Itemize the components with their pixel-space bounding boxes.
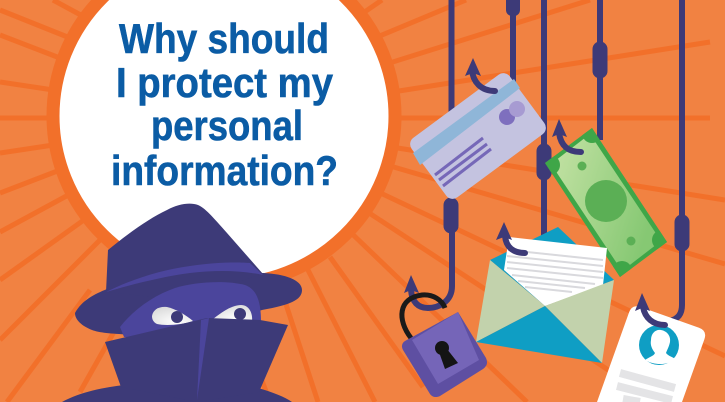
hook on banknote (552, 119, 581, 152)
hook on document (635, 293, 665, 325)
coat collar (105, 318, 288, 402)
title: Why should (119, 15, 329, 62)
line 1 connector (444, 205, 458, 226)
note corners (545, 128, 667, 277)
portrait badge (639, 325, 679, 365)
envelope bottom (476, 306, 602, 363)
fishing line 2 (506, 0, 520, 90)
fishing line 4 (597, 0, 603, 140)
spy figure (62, 204, 302, 402)
keyhole (435, 341, 458, 369)
right eye (213, 305, 252, 322)
padlock face (412, 312, 479, 384)
padlock (402, 312, 487, 397)
envelope back flap (490, 227, 614, 306)
padlock body (402, 312, 487, 397)
hook on padlock arrowhead (404, 275, 419, 293)
fishing line 5 with hook (670, 0, 682, 321)
hook on envelope (496, 222, 525, 253)
left eye (152, 307, 193, 325)
hat crown (106, 204, 263, 300)
id document (597, 306, 705, 402)
fishing line 1 with hook (411, 0, 452, 308)
envelope right flap (545, 280, 614, 363)
spy coat shoulders (62, 385, 292, 402)
hat brim (75, 273, 302, 335)
note small circles (578, 162, 636, 246)
left pupil (171, 311, 183, 323)
hat band (106, 262, 263, 292)
card text lines (435, 138, 491, 186)
letter lines (507, 250, 603, 292)
envelope left flap (476, 260, 545, 342)
collar fold (197, 318, 209, 400)
face shadow (120, 282, 261, 345)
note centre circle (585, 180, 627, 222)
white speech circle with orange ring (53, 0, 395, 284)
portrait silhouette (645, 330, 675, 364)
card body (407, 70, 549, 202)
padlock shackle (402, 295, 445, 338)
envelope (476, 227, 614, 363)
title (111, 15, 338, 194)
title: personal (151, 102, 303, 149)
credit card (407, 70, 549, 202)
title: I protect my (116, 59, 334, 106)
card stripe (413, 79, 520, 165)
banknote (545, 128, 667, 277)
right pupil (234, 308, 246, 320)
letter (504, 237, 607, 306)
card chip circles (499, 101, 525, 125)
document text bars (617, 373, 675, 402)
hook on card (465, 58, 495, 91)
title: information? (111, 147, 338, 194)
fishing line 3 (541, 0, 547, 240)
document page (597, 306, 705, 402)
